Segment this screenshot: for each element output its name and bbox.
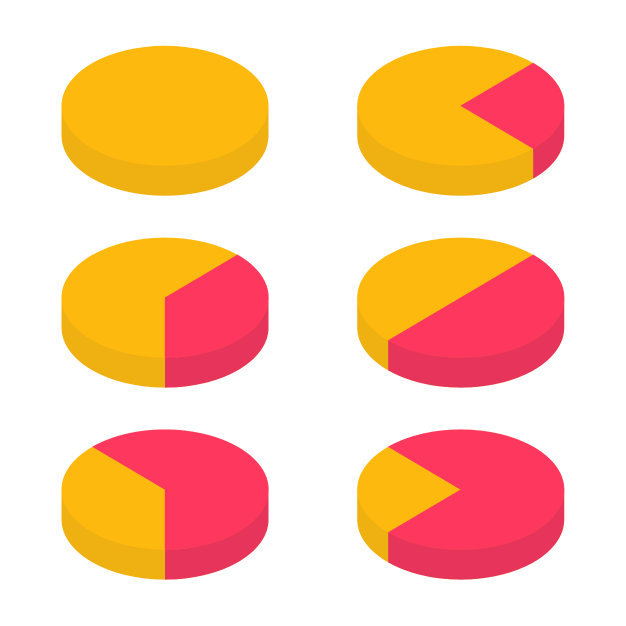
pie chart: full yellow (62, 46, 268, 196)
pie chart: one third red (62, 238, 268, 388)
pie chart: half red (357, 238, 564, 388)
pie chart: small red wedge on the right (357, 46, 564, 196)
pie chart: two thirds red (62, 430, 269, 580)
pie chart: mostly red with small yellow wedge (357, 430, 564, 580)
